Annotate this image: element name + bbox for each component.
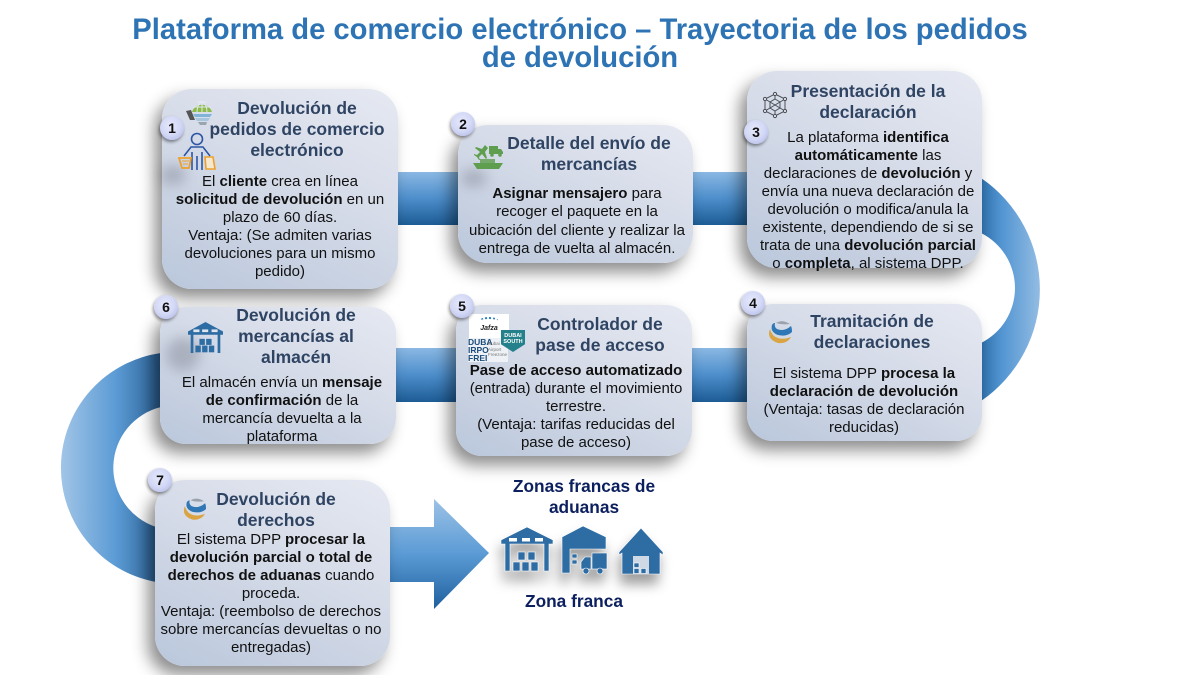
bar: step 2 to 3: [690, 172, 750, 225]
heading: declaraciones: [814, 332, 930, 352]
description: declaración de devolución: [770, 383, 958, 400]
icon: network cube: [762, 92, 788, 118]
arrow to free zones: [387, 499, 489, 609]
heading: electrónico: [250, 140, 344, 160]
description: ubicación del cliente y realizar la: [469, 222, 685, 239]
description: reducidas): [829, 419, 899, 436]
badge: 6: 6: [162, 299, 170, 315]
heading: [209, 98, 385, 160]
description: envía una nueva declaración de: [762, 183, 974, 200]
description: Ventaja: (reembolso de derechos: [161, 603, 381, 620]
description: Ventaja: (Se admiten varias: [188, 227, 372, 244]
description: La plataforma identifica: [787, 129, 949, 146]
description: recoger el paquete en la: [496, 203, 658, 220]
heading: Tramitación de: [810, 311, 934, 331]
heading: Devolución de: [237, 98, 357, 118]
heading: [791, 81, 946, 122]
arc: step 3 to 4: [981, 178, 1040, 401]
icon: globe and laptop: [186, 101, 212, 125]
panel: step 6: [160, 307, 396, 444]
description: El sistema DPP procesa la: [773, 365, 955, 382]
description: [176, 173, 384, 280]
description: declaraciones de devolución y: [764, 165, 972, 182]
badge: 7: [148, 468, 172, 492]
heading: customs free zones: Zonas francas de: [513, 476, 655, 496]
icon: house storage: [619, 528, 663, 574]
badge: 7: 7: [156, 472, 164, 488]
title: [132, 14, 1028, 74]
description: [764, 365, 964, 436]
badge: 4: 4: [749, 295, 757, 311]
description: (Ventaja: tasas de declaración: [764, 401, 964, 418]
logo: Dubai Airport Freezone: Freezone: [488, 352, 507, 357]
description: mercancía devuelta a la: [202, 410, 362, 427]
description: [760, 129, 976, 272]
logo: Jafza: Jafza: [480, 325, 498, 332]
icon: DPP globe: [184, 498, 206, 520]
logo: Jafza: [469, 314, 509, 338]
icon: customer with basket and bag: [178, 132, 216, 170]
description: El cliente crea en línea: [202, 173, 358, 190]
logo: Dubai South: SOUTH: [503, 339, 523, 345]
description: [161, 531, 381, 656]
description: Pase de acceso automatizado: [470, 362, 682, 379]
description: (Ventaja: tarifas reducidas del: [477, 416, 675, 433]
badge: 4: [741, 291, 765, 315]
heading: Devolución de: [216, 489, 336, 509]
description: devoluciones para un mismo: [185, 245, 375, 262]
icons: free zone buildings: [494, 526, 667, 592]
label: free zone: Zona franca: [525, 591, 623, 611]
panel: step 4: [747, 304, 982, 441]
panel: step 7: [155, 480, 390, 666]
logos: free zones: [468, 314, 525, 362]
description: [470, 362, 682, 451]
title: Plataforma de comercio electrónico – Trayectoria de los pedidos: [132, 14, 1028, 46]
icon: DPP globe: [769, 321, 792, 344]
heading: Devolución de: [236, 305, 356, 325]
description: entregadas): [231, 639, 311, 656]
heading: pase de acceso: [535, 335, 665, 355]
description: o completa, al sistema DPP.: [772, 255, 964, 272]
logo: Dubai South: [501, 330, 525, 352]
heading: Detalle del envío de: [507, 133, 671, 153]
description: (entrada) durante el movimiento: [470, 380, 682, 397]
description: entrega de vuelta al almacén.: [479, 240, 675, 257]
description: solicitud de devolución en un: [176, 191, 384, 208]
heading: mercancías: [541, 154, 637, 174]
arc: step 6 to 7: [61, 353, 161, 582]
description: sobre mercancías devueltas o no: [161, 621, 381, 638]
logo: Dubai South: DUBAI: [504, 333, 522, 339]
panel: step 2: [458, 125, 693, 263]
badge: 6: [154, 295, 178, 319]
panel: step 1: [162, 89, 398, 289]
badge: 2: 2: [459, 116, 467, 132]
description: devolución o modifica/anula la: [768, 201, 968, 218]
description: existente, dependiendo de si se: [762, 219, 974, 236]
description: proceda.: [242, 585, 300, 602]
badge: 1: 1: [168, 120, 176, 136]
description: [469, 185, 685, 257]
heading: Presentación de la: [791, 81, 945, 101]
heading: [810, 311, 934, 352]
description: terrestre.: [546, 398, 606, 415]
badge: 1: [160, 116, 184, 140]
heading: [507, 133, 671, 174]
heading: [216, 489, 336, 530]
badge: 2: [451, 112, 475, 136]
heading: pedidos de comercio: [209, 119, 385, 139]
panel: step 5: [456, 305, 692, 456]
description: plazo de 60 días.: [223, 209, 337, 226]
heading: derechos: [237, 510, 315, 530]
logo: Dubai Airport Freezone: [468, 338, 508, 362]
title: de devolución: [482, 42, 678, 74]
heading: customs free zones: aduanas: [549, 497, 619, 517]
icon: plane, truck and ship: [473, 145, 503, 169]
heading: almacén: [261, 347, 331, 367]
description: trata de una devolución parcial: [760, 237, 976, 254]
bar: step 4 to 5: [689, 348, 750, 402]
description: [182, 374, 382, 445]
description: pase de acceso): [521, 434, 631, 451]
description: de confirmación de la: [206, 392, 358, 409]
logo: Dubai Airport Freezone: IRPO: [468, 345, 489, 355]
logo: Dubai Airport Freezone: Dubai: [488, 341, 500, 346]
heading: [236, 305, 356, 367]
heading: customs free zones: [513, 476, 655, 517]
description: plataforma: [247, 428, 317, 445]
heading: [535, 314, 665, 355]
badge: 5: [450, 294, 474, 318]
icon: warehouse with truck: [562, 526, 607, 574]
heading: mercancías al: [238, 326, 354, 346]
heading: Controlador de: [537, 314, 663, 334]
bar: step 5 to 6: [393, 348, 459, 402]
description: Asignar mensajero para: [492, 185, 662, 202]
description: pedido): [255, 263, 305, 280]
bar: step 1 to 2: [395, 172, 461, 225]
badge: 3: 3: [752, 124, 760, 140]
description: devolución parcial o total de: [170, 549, 372, 566]
description: derechos de aduanas cuando: [168, 567, 374, 584]
description: El almacén envía un mensaje: [182, 374, 382, 391]
badge: 3: [744, 120, 768, 144]
badge: 5: 5: [458, 298, 466, 314]
description: El sistema DPP procesar la: [177, 531, 365, 548]
panel: step 3: [747, 71, 982, 268]
description: automáticamente las: [795, 147, 941, 164]
heading: declaración: [819, 102, 917, 122]
icon: warehouse: [501, 527, 553, 571]
icon: warehouse: [188, 322, 223, 353]
logo: Dubai Airport Freezone: Airport: [488, 346, 501, 352]
